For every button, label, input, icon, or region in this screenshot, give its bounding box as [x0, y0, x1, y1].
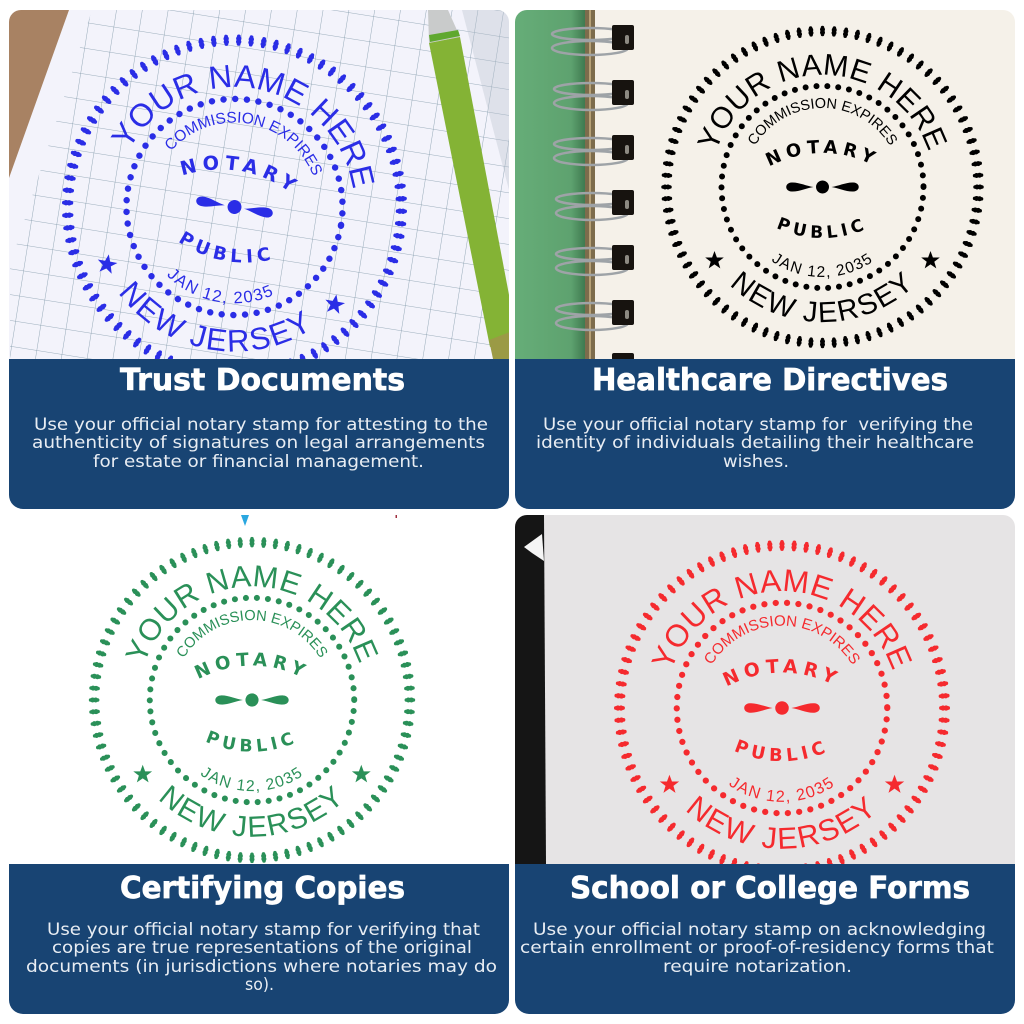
outer bead ring: [62, 34, 407, 359]
heading: Trust Documents: [120, 363, 405, 398]
caption panel: [9, 864, 509, 1014]
description: for estate or financial management.: [93, 452, 424, 472]
stamp: black: [661, 26, 984, 348]
state: NEW JERSEY: [686, 796, 872, 849]
commission arc: COMMISSION EXPIRES: [748, 98, 897, 144]
card: Certifying Copies: [9, 515, 509, 1014]
description: wishes.: [723, 452, 789, 472]
knot ornament: [215, 693, 289, 707]
grid lines: [9, 10, 509, 359]
heading: School or College Forms: [570, 871, 970, 906]
outer bead ring: [663, 28, 982, 346]
inner dot ring: [123, 96, 346, 318]
notary: NOTARY: [194, 652, 307, 678]
description: require notarization.: [663, 957, 852, 977]
green cover: [515, 10, 585, 359]
commission arc: COMMISSION EXPIRES: [166, 112, 322, 175]
small blue mark: [241, 515, 249, 526]
brown desk corner: [9, 10, 69, 178]
notebook spine: [585, 10, 595, 359]
knot ornament: [786, 180, 859, 194]
name arc: YOUR NAME HERE: [697, 54, 948, 150]
description: [520, 920, 994, 977]
stars: [96, 253, 346, 315]
black binder edge: [515, 515, 546, 864]
inner dot ring: [722, 86, 924, 288]
inner dot ring: [677, 603, 887, 813]
stars: [660, 775, 904, 793]
name arc: YOUR NAME HERE: [651, 569, 912, 670]
knot ornament: [196, 196, 273, 218]
name arc: YOUR NAME HERE: [125, 565, 378, 663]
stamp: red: [614, 540, 950, 864]
heading: Healthcare Directives: [592, 363, 948, 398]
notary: NOTARY: [765, 140, 877, 166]
description: [32, 415, 488, 472]
description: [536, 415, 974, 472]
name arc: YOUR NAME HERE: [110, 65, 374, 188]
commission arc: COMMISSION EXPIRES: [177, 610, 328, 657]
torn white notch: [524, 534, 544, 561]
card: Healthcare Directives: [515, 10, 1015, 509]
card: School or College Forms: [515, 515, 1015, 1014]
description: Use your official notary stamp for attesting to the: [34, 415, 488, 435]
outer bead ring: [91, 539, 413, 861]
public: PUBLIC: [206, 730, 294, 752]
photo: spiral notebook: [515, 10, 1015, 359]
date: JAN 12, 2035: [168, 269, 272, 305]
photo: graph paper and green pen: [9, 10, 509, 359]
description: Use your official notary stamp for verifying the: [543, 415, 973, 435]
date: JAN 12, 2035: [772, 253, 872, 279]
public: PUBLIC: [777, 217, 864, 238]
heading: Certifying Copies: [120, 871, 405, 906]
photo: grey card on black: [515, 515, 1015, 864]
description: [26, 920, 497, 995]
description: Use your official notary stamp on acknowledging: [533, 920, 986, 940]
public: PUBLIC: [179, 231, 270, 262]
description: authenticity of signatures on legal arrangements: [32, 433, 485, 453]
pen shadow: [462, 10, 509, 190]
knot ornament: [744, 701, 820, 715]
green pen: [428, 10, 510, 359]
caption panel: [515, 359, 1015, 509]
caption panel: [9, 359, 509, 509]
stars: [705, 251, 940, 268]
date: JAN 12, 2035: [201, 767, 302, 793]
card: Trust Documents: [9, 10, 509, 509]
photo: white paper: [88, 515, 416, 864]
inner dot ring: [150, 598, 354, 802]
state: NEW JERSEY: [730, 271, 908, 322]
public: PUBLIC: [735, 739, 825, 762]
date: JAN 12, 2035: [730, 777, 833, 804]
description: Use your official notary stamp for verifying that: [47, 920, 480, 940]
commission arc: COMMISSION EXPIRES: [705, 615, 860, 664]
description: documents (in jurisdictions where notaries may do: [26, 957, 497, 977]
outer bead ring: [616, 542, 948, 874]
state: NEW JERSEY: [120, 280, 306, 352]
stars: [133, 765, 371, 782]
description: copies are true representations of the original: [52, 938, 472, 958]
small red speck: [396, 515, 397, 518]
description: identity of individuals detailing their healthcare: [536, 433, 974, 453]
stamp: green: [88, 536, 416, 864]
notary: NOTARY: [180, 155, 298, 190]
description: certain enrollment or proof-of-residency forms that: [520, 938, 994, 958]
caption panel: [515, 864, 1015, 1014]
description: so).: [245, 975, 274, 995]
spiral binding: [552, 25, 634, 363]
state: NEW JERSEY: [159, 785, 339, 837]
notary: NOTARY: [722, 658, 839, 686]
stamp: blue: [62, 34, 407, 359]
